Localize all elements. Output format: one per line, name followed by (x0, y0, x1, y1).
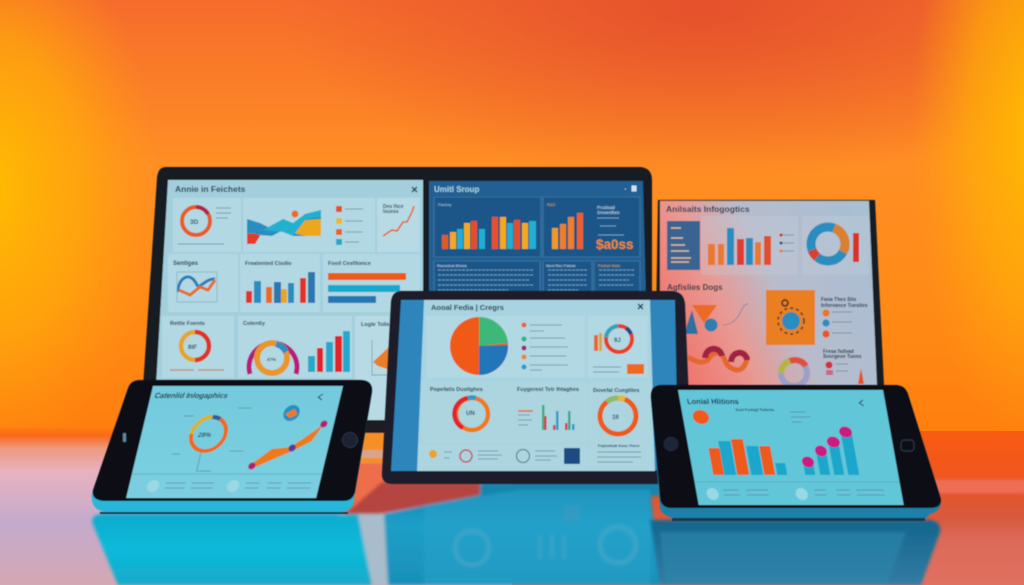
card: partial chart: Logle Tolis (361, 322, 390, 328)
big sales figure: $a0ss (596, 237, 634, 252)
blue screen (391, 300, 678, 471)
phone body (651, 385, 941, 508)
card: partial chart (355, 316, 395, 420)
floor: left half (0, 428, 512, 585)
home button (342, 432, 358, 448)
right dark panel (429, 181, 646, 300)
small legend: Fresa fsdvad (823, 349, 854, 355)
winding ribbon chart (688, 353, 748, 370)
left screen (154, 180, 423, 420)
reflection: right phone screen (660, 532, 906, 585)
card: donut row: UN (466, 411, 475, 417)
orange badge (692, 410, 710, 424)
lower strip dark band (341, 420, 385, 433)
text snippets: Posher Note (598, 263, 621, 268)
grouped bars (438, 202, 536, 249)
reflection: center tablet (384, 486, 660, 585)
card: donut: Rettie Foents (170, 321, 205, 327)
share icon (318, 394, 323, 400)
dark blue strip under tablet (480, 482, 660, 496)
floor reflections of devices (92, 462, 940, 585)
home button (901, 440, 914, 451)
monitor body (655, 200, 884, 386)
card: small donut: 9J (614, 338, 621, 344)
second bars: R&D (547, 202, 556, 207)
orange infographic card (766, 290, 815, 345)
reflection: left phone (92, 514, 372, 585)
divider labels (790, 412, 812, 422)
dark red wedge (345, 482, 520, 514)
big sales figure: Smoesthes (597, 210, 620, 215)
screen (678, 390, 904, 505)
background: red glow top (280, 0, 1024, 180)
left phone (92, 380, 372, 514)
title: Catenlid Inlogaphics (154, 391, 229, 400)
lower donut (781, 360, 807, 386)
floor: right half (512, 431, 1024, 585)
area line (249, 424, 324, 468)
footer (128, 474, 322, 492)
speaker (123, 433, 126, 442)
reflection: faint tablet donuts (455, 505, 636, 565)
card: gauge and bars: 47% (267, 357, 276, 362)
title: Annie in Feichets (175, 184, 246, 194)
second bars (547, 202, 583, 249)
text snippets: Ravocinal Mores (437, 263, 467, 268)
close icon (638, 304, 643, 309)
chart caption: Scot Fustagl Tiobrets (735, 408, 775, 412)
phone rim (92, 380, 372, 512)
reflection: right phone (650, 520, 940, 585)
share icon (859, 400, 864, 406)
panel icons (625, 186, 636, 191)
red bar (853, 233, 859, 262)
small legend (823, 349, 864, 384)
lower text cards (434, 261, 640, 300)
main monitor (140, 167, 652, 463)
panel title: Umitl Sroup (434, 185, 479, 194)
card: gauge and bars (238, 316, 352, 378)
card: orange donut (589, 382, 651, 470)
checklist block: Inforvance Tuesites (821, 303, 868, 309)
big sales figure: Prodsual (597, 205, 615, 210)
title: Aooal Fedia | Cregrs (431, 303, 504, 312)
screen (126, 386, 343, 498)
card outlines (701, 216, 869, 275)
area chart card (243, 198, 375, 252)
text snippets: Next Rec Fistore (546, 263, 577, 268)
card: horizontal bars (323, 254, 420, 312)
geometric chart (684, 304, 748, 334)
card: donut row (422, 382, 587, 442)
title: Lonial Hlitions (686, 397, 739, 406)
chart frames (434, 197, 640, 257)
card: gauge and bars: Cotentiy (243, 321, 266, 327)
grouped bars: Pactory (438, 202, 452, 207)
card: pie (426, 316, 585, 378)
line chart card: Isuess (383, 209, 399, 215)
card: bar chart: Freatented Cisdio (245, 261, 292, 267)
pale gap (355, 514, 395, 585)
background: yellow glow left (0, 0, 160, 460)
salmon floor between devices (340, 462, 390, 516)
card: orange donut: Fopentisat Auou Thero (598, 444, 640, 448)
line points (247, 420, 328, 470)
card: donut (162, 316, 234, 378)
line chart card (377, 198, 420, 252)
lower strip gray band (350, 450, 385, 458)
line chart card: Des lhce (383, 204, 404, 210)
donut value: 28% (196, 432, 212, 439)
card: Sentiges: Sentiges (173, 261, 199, 267)
right phone (651, 385, 941, 521)
donut card: 3D (190, 219, 199, 226)
footer (695, 482, 903, 500)
purple-capped bars (796, 426, 860, 475)
ribbon accent (705, 349, 747, 362)
phone bottom shadow line (672, 518, 925, 521)
card: Sentiges (168, 254, 238, 312)
callout lines (168, 408, 254, 471)
monitor body (140, 167, 652, 432)
phone screen content (678, 390, 904, 505)
monitor lower strip (341, 432, 386, 463)
card: donut: 8tF (188, 345, 197, 351)
card: donut row: Popefatis Dustighes (430, 387, 483, 393)
checklist block: Fana Thes Sits (821, 297, 857, 303)
card: orange donut: 1II (612, 415, 619, 421)
globe icon (282, 405, 301, 421)
background: orange wall (0, 0, 1024, 432)
big sales figure (596, 205, 634, 252)
donut (187, 417, 230, 451)
donut chart (811, 227, 845, 261)
close icon (412, 187, 417, 192)
title: Anilsaits Infogogtics (666, 204, 750, 214)
background: yellow glow right (910, 0, 1024, 450)
monitor screen (660, 201, 877, 386)
text snippets (437, 263, 621, 268)
tablet body (382, 291, 692, 484)
card: small donut (588, 316, 648, 378)
right monitor (655, 200, 884, 386)
blue info box (667, 221, 700, 270)
phone screen content (126, 386, 343, 498)
center tablet (382, 291, 692, 484)
bar chart (707, 439, 787, 475)
bar chart (708, 228, 794, 265)
footer icon row (419, 445, 587, 470)
reflection: center tablet screen (424, 490, 650, 585)
light panel (417, 300, 655, 471)
small legend: Sovrgeve Tuons (823, 354, 862, 360)
checklist block (821, 297, 868, 338)
card: orange donut: Dovefal Cuegtites (593, 388, 639, 394)
card: horizontal bars: Fooil Cesfitonce (328, 261, 371, 267)
card: bar chart (240, 254, 320, 312)
phone bottom shadow line (100, 512, 348, 514)
card: donut row: Fuygerest Tetr Ihtaghes (517, 387, 579, 393)
phone rim (651, 385, 941, 518)
donut card (173, 198, 241, 252)
section heading: Agfislies Dogs (667, 283, 723, 292)
phone body (93, 380, 372, 501)
camera (664, 436, 678, 452)
